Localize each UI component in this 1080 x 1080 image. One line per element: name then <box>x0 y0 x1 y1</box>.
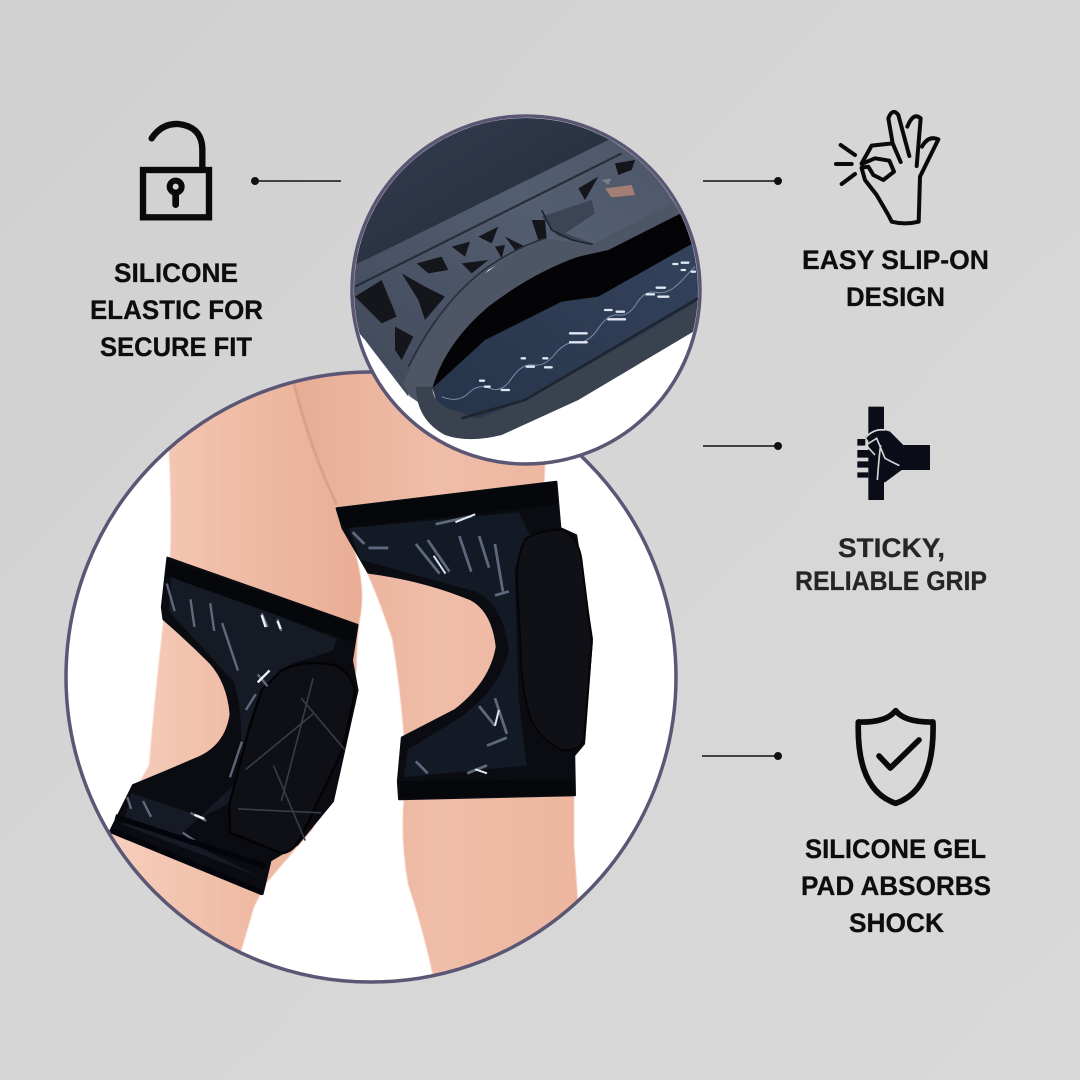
text: silicone gel pad: PAD ABSORBS <box>801 871 991 901</box>
closeup: black inner opening <box>430 210 705 393</box>
photo: left knee pad <box>111 558 357 894</box>
closeup: outer grey band with cut-out pattern <box>354 140 680 396</box>
connector: shock feature <box>702 753 781 759</box>
closeup: stitched rim <box>403 202 682 403</box>
text: silicone elastic: ELASTIC FOR <box>90 295 263 325</box>
connector: grip feature <box>703 443 781 449</box>
text: easy slip-on <box>802 245 989 312</box>
icon: hand gripping pole <box>857 407 930 500</box>
connector: lock feature <box>252 178 341 184</box>
text: easy slip-on: EASY SLIP-ON <box>802 245 989 275</box>
text: sticky grip: STICKY, <box>838 533 945 563</box>
text: silicone gel pad: SILICONE GEL <box>805 834 986 864</box>
photo: right leg <box>291 354 578 987</box>
closeup: dark upper fabric <box>356 118 612 265</box>
photo: left leg <box>111 362 362 955</box>
text: silicone gel pad <box>801 834 991 938</box>
icon: shield with checkmark <box>858 711 933 803</box>
text: silicone gel pad: SHOCK <box>849 908 944 938</box>
infographic canvas <box>64 110 990 984</box>
photo: right knee pad <box>337 482 592 799</box>
text: silicone elastic <box>90 258 263 362</box>
text: silicone elastic: SILICONE <box>114 258 238 288</box>
panel: detail close-up circle <box>345 110 708 464</box>
closeup: inner silicone pad <box>432 238 702 423</box>
icon: open padlock <box>143 124 209 217</box>
connector: slip-on feature <box>703 178 781 184</box>
text: sticky grip: RELIABLE GRIP <box>795 566 987 596</box>
text: silicone elastic: SECURE FIT <box>100 332 252 362</box>
closeup: lower rim <box>416 300 702 439</box>
panel: knee pads photo circle <box>66 354 676 987</box>
text: sticky grip <box>795 533 987 596</box>
text: easy slip-on: DESIGN <box>846 282 945 312</box>
icon: OK hand gesture <box>836 112 938 223</box>
